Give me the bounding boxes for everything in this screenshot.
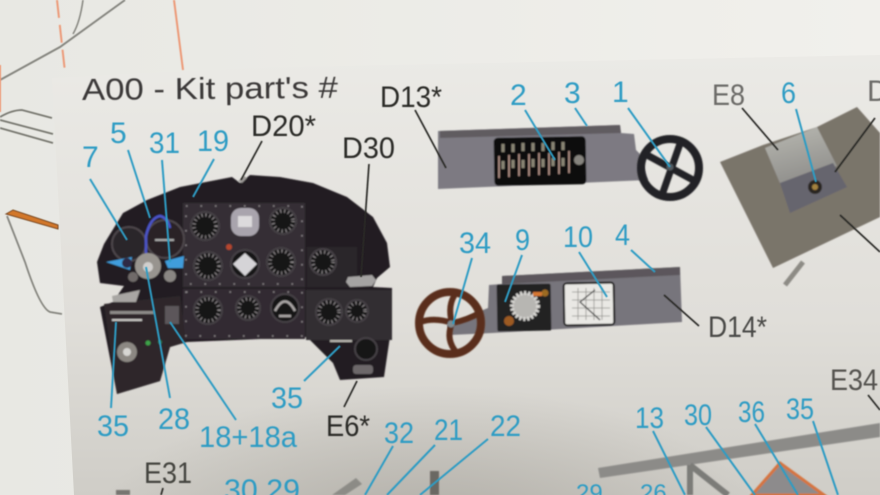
blue part numbers: 2	[510, 79, 527, 112]
blue part numbers: 13	[635, 402, 664, 435]
panel body	[97, 175, 392, 394]
brown handwheel	[419, 292, 481, 354]
blue part numbers: 9	[515, 224, 530, 257]
black part labels	[144, 75, 880, 490]
D13 side panel	[438, 125, 648, 189]
blue part numbers: 19	[197, 125, 229, 158]
leader lines: black	[161, 108, 880, 495]
blue part numbers: 35	[271, 382, 303, 415]
black part labels: E31	[144, 457, 192, 490]
blue part numbers: 3	[564, 77, 581, 110]
background sheet line drawing	[0, 0, 183, 314]
blue part numbers: 22	[490, 410, 521, 443]
black part labels: E8	[712, 79, 745, 112]
silver knob	[135, 253, 161, 279]
left gauges	[112, 227, 146, 261]
blue part numbers: 35	[786, 393, 814, 426]
blue part numbers: 6	[781, 77, 796, 110]
rivets	[186, 206, 302, 284]
D14 side panel	[447, 267, 682, 335]
blue part numbers: 34	[459, 227, 491, 260]
lower assembly	[116, 423, 880, 495]
E8 / D block	[720, 107, 880, 285]
black part labels: D13*	[380, 81, 442, 114]
blue part numbers: 7	[82, 141, 99, 174]
black handwheel	[641, 138, 699, 197]
blue part numbers: 32	[384, 417, 414, 450]
gauges	[191, 212, 219, 240]
black part labels: D20*	[251, 110, 316, 143]
blue part numbers	[82, 76, 814, 495]
blue part numbers: 28	[158, 403, 190, 436]
blue parts	[106, 256, 184, 270]
blue part numbers: 10	[563, 221, 593, 254]
instrument panel	[97, 175, 392, 394]
blue part numbers: 35	[97, 410, 129, 443]
blue part numbers: 5	[110, 117, 127, 150]
blue part numbers: 30	[684, 399, 712, 432]
blue part numbers: 1	[612, 76, 629, 109]
title: A00 - Kit part's #	[82, 70, 339, 107]
lower left controls	[110, 311, 154, 314]
blue part numbers: 36	[738, 396, 765, 429]
blue part numbers: 21	[434, 414, 463, 447]
blue part numbers: 4	[615, 219, 630, 252]
blue part numbers: 18+18a	[199, 421, 297, 454]
black part labels: E6*	[326, 410, 370, 443]
blue part numbers: 31	[149, 127, 180, 160]
black part labels: D30	[342, 132, 395, 165]
silver tabs	[346, 275, 376, 287]
centre instrument block	[183, 203, 305, 287]
black part labels: D14*	[708, 311, 767, 344]
leader lines: blue	[90, 108, 838, 495]
